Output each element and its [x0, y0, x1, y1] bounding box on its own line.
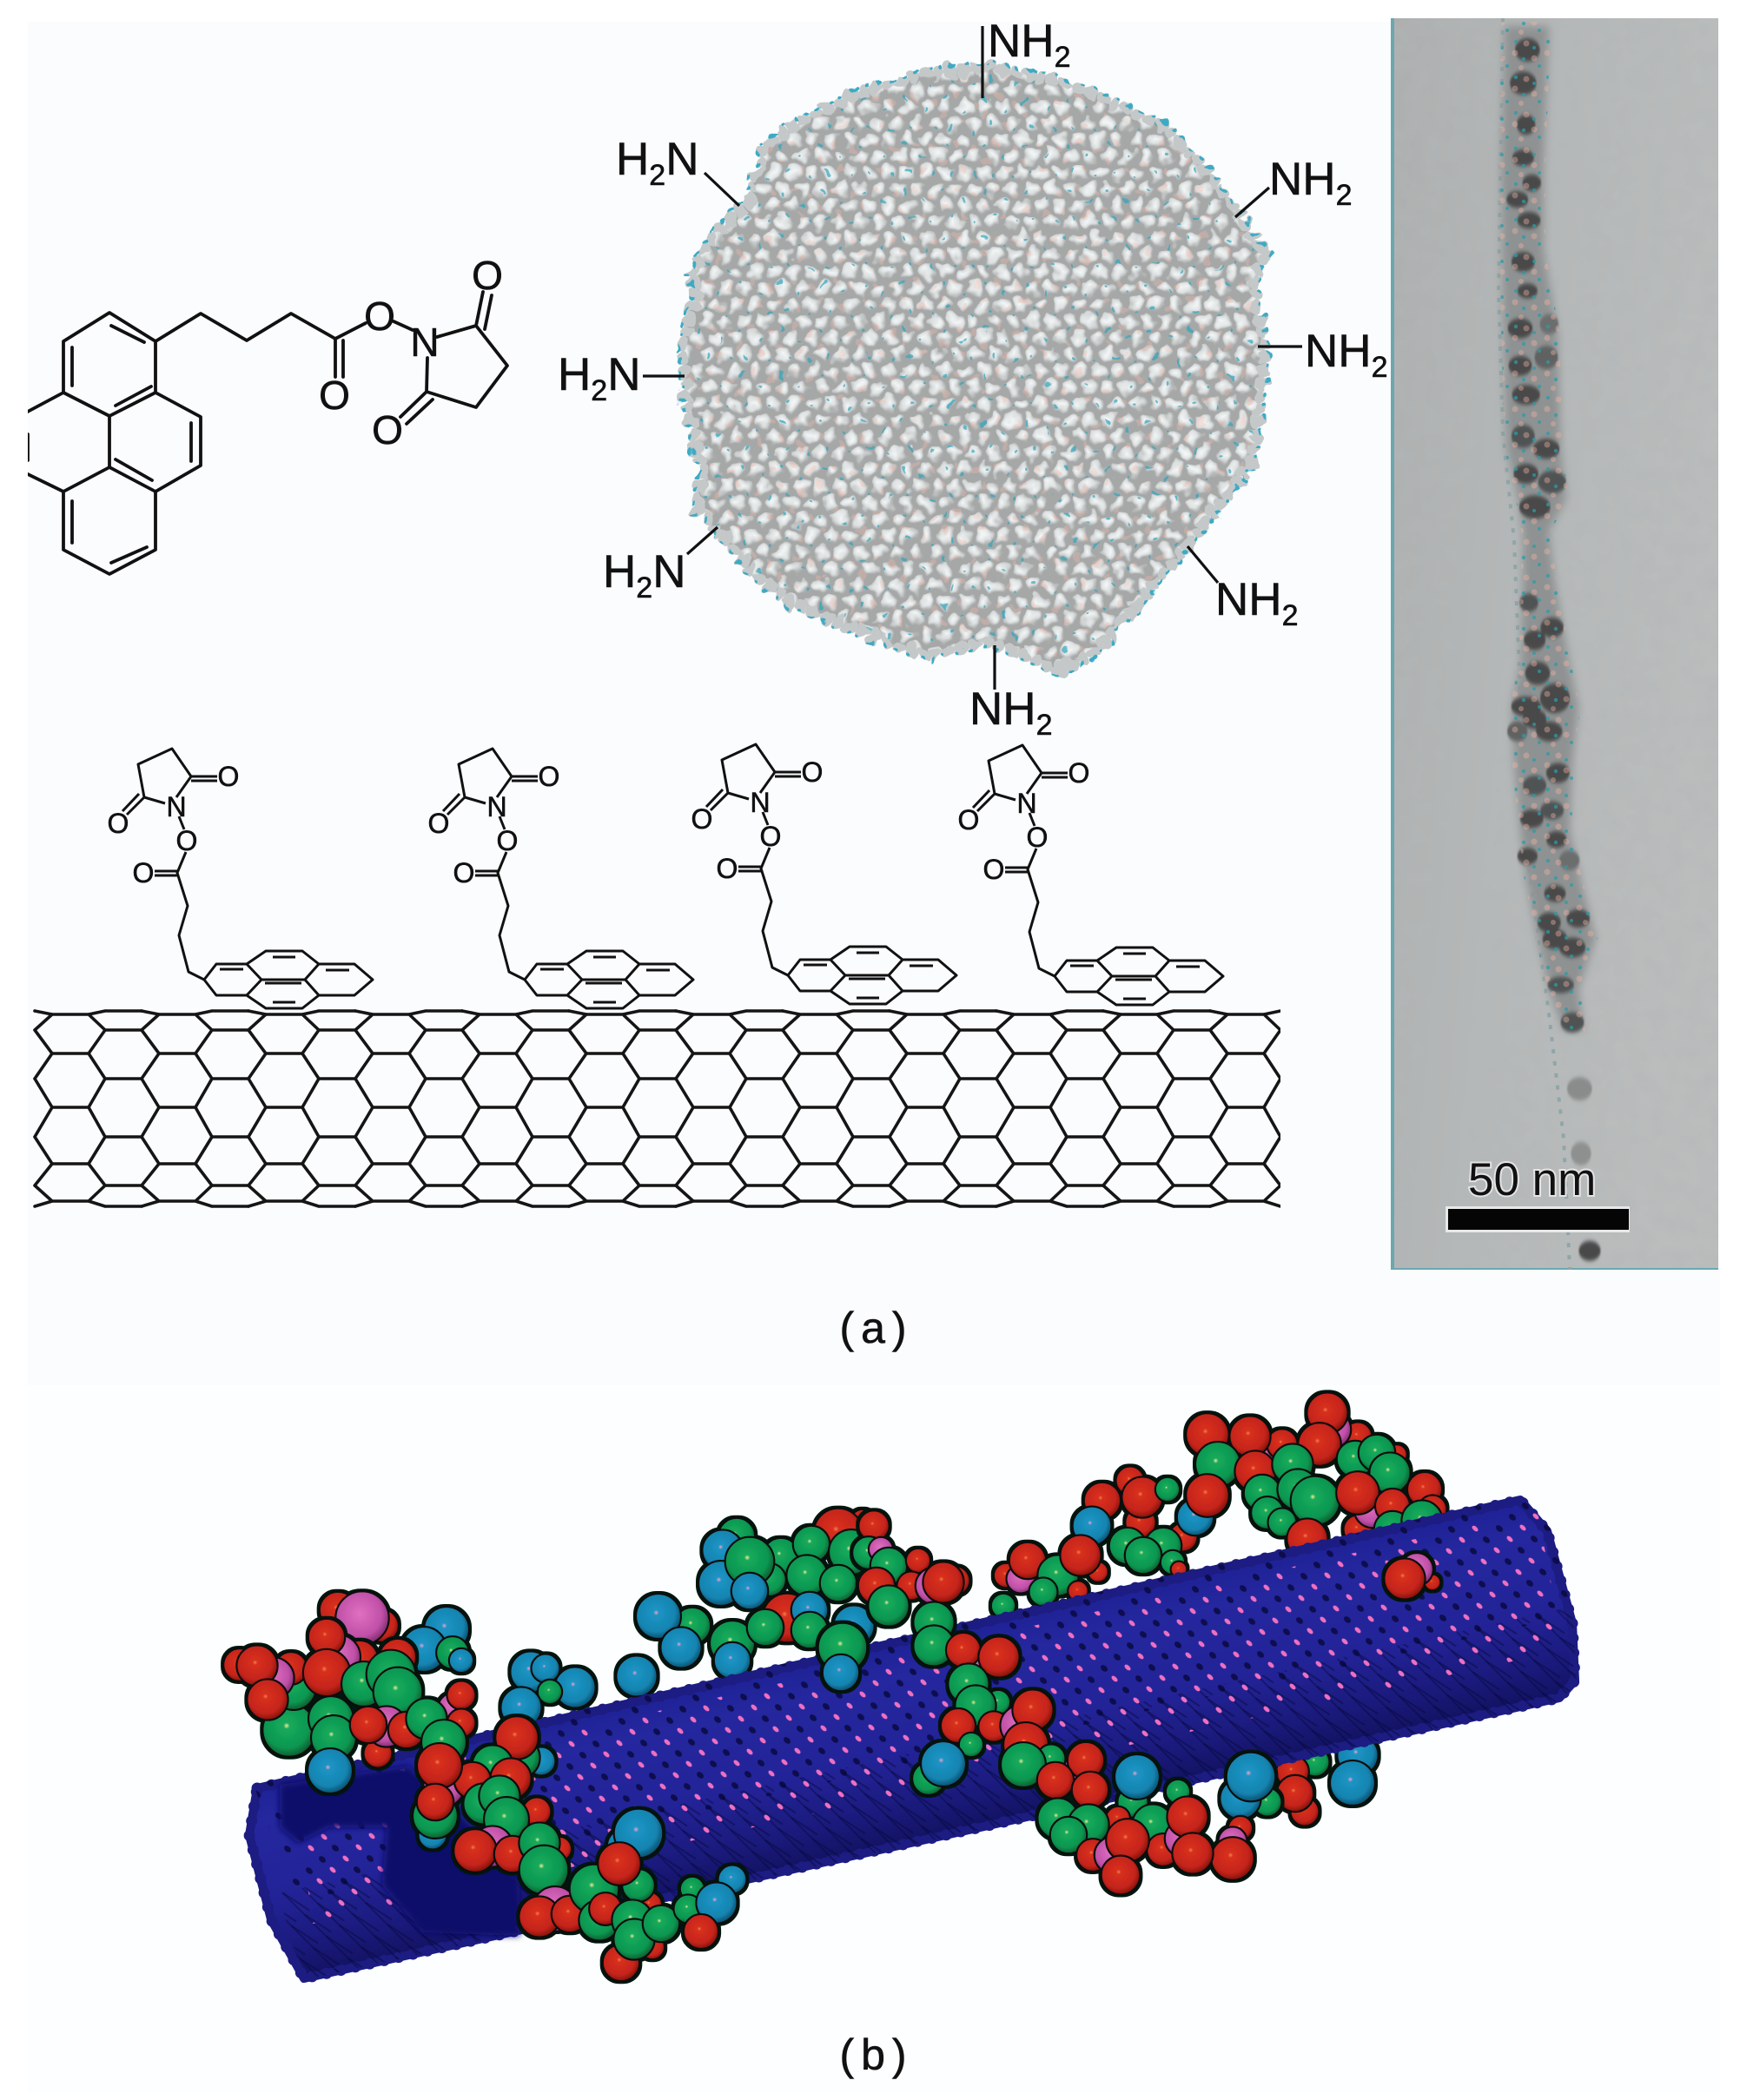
molecule: pyrene butyric acid succinimidyl ester: O — [364, 294, 395, 339]
linker molecule 3: O — [691, 803, 712, 835]
label: lower left H2N: H — [603, 546, 636, 598]
linker molecule 4: O — [983, 854, 1004, 885]
DNA strand segments in front of the tube — [223, 1510, 1440, 1981]
nanoparticle sphere with amine groups — [558, 16, 1387, 742]
linker molecule 4: O — [1027, 822, 1048, 853]
linker molecule 3: N — [750, 787, 771, 818]
linker molecule 3: O — [802, 756, 823, 788]
label: lower right NH2: NH — [1215, 574, 1282, 625]
label: lower right NH2: 2 — [1282, 599, 1298, 632]
linker molecule 2: O — [539, 761, 559, 792]
DNA-wrapped nanotube model — [223, 1392, 1577, 1981]
caption (a): (a) — [839, 1304, 914, 1352]
linker molecule 1: N — [166, 791, 187, 822]
linker molecule 1: O — [133, 857, 154, 888]
molecule: pyrene butyric acid succinimidyl ester: N — [410, 320, 440, 365]
linker molecule 1: O — [108, 808, 129, 839]
label: upper left H2N: 2 — [649, 159, 665, 192]
sphere of packed beads — [678, 63, 1269, 674]
linker molecule 2 — [428, 749, 693, 1008]
amine bond lines — [643, 26, 1302, 690]
linker molecule 4: O — [958, 804, 979, 835]
blue nanotube — [249, 1496, 1577, 1980]
linker molecule 2: O — [497, 825, 518, 856]
scale bar — [1446, 1154, 1630, 1232]
linker molecule 2: O — [453, 857, 474, 888]
label: top NH2: NH — [988, 16, 1055, 67]
nanoparticle-coated body — [1501, 26, 1596, 1031]
molecule: pyrene butyric acid succinimidyl ester: O — [372, 407, 403, 452]
TEM micrograph panel — [1391, 18, 1718, 1270]
molecule: pyrene butyric acid succinimidyl ester: O — [319, 373, 350, 418]
linker molecule 1 — [108, 749, 373, 1008]
linker molecule 4: N — [1016, 788, 1037, 819]
linker molecule 4: O — [1068, 757, 1089, 789]
label: top NH2: 2 — [1055, 41, 1070, 74]
label: middle left H2N: H — [558, 349, 591, 400]
DNA strand segments behind the tube — [320, 1392, 1453, 1826]
linker molecule 2: N — [486, 791, 507, 822]
label: upper right NH2: NH — [1269, 154, 1336, 205]
label: middle left H2N: 2 — [591, 374, 607, 407]
label: right NH2: 2 — [1372, 351, 1387, 384]
label: upper left H2N: H — [616, 134, 649, 185]
carbon nanotube wall — [1499, 18, 1570, 1270]
label: lower left H2N: 2 — [636, 571, 652, 604]
linker molecule 3 — [691, 744, 956, 1004]
linker molecule 3: O — [760, 821, 781, 852]
label: bottom NH2: NH — [969, 683, 1036, 735]
linker molecule 1: O — [218, 761, 239, 792]
caption (b): (b) — [839, 2031, 914, 2079]
label: right NH2: NH — [1305, 326, 1372, 377]
linker molecule 3: O — [717, 853, 738, 884]
carbon nanotube hexagonal lattice — [35, 1011, 1317, 1206]
dark nanoparticles — [1506, 38, 1601, 1261]
teal and pink noise on the tube — [1499, 22, 1598, 1031]
linker molecule 2: O — [428, 808, 449, 839]
label: middle left H2N: N — [607, 349, 640, 400]
label: upper left H2N: N — [665, 134, 698, 185]
linker molecule 4 — [958, 745, 1223, 1005]
label: lower left H2N: N — [652, 546, 685, 598]
label: upper right NH2: 2 — [1336, 179, 1352, 212]
linker molecule 1: O — [176, 825, 197, 856]
molecule: pyrene butyric acid succinimidyl ester — [24, 253, 507, 574]
scale label: 50 nm — [1468, 1154, 1596, 1205]
molecule: pyrene butyric acid succinimidyl ester: O — [472, 253, 503, 298]
label: bottom NH2: 2 — [1036, 709, 1052, 742]
